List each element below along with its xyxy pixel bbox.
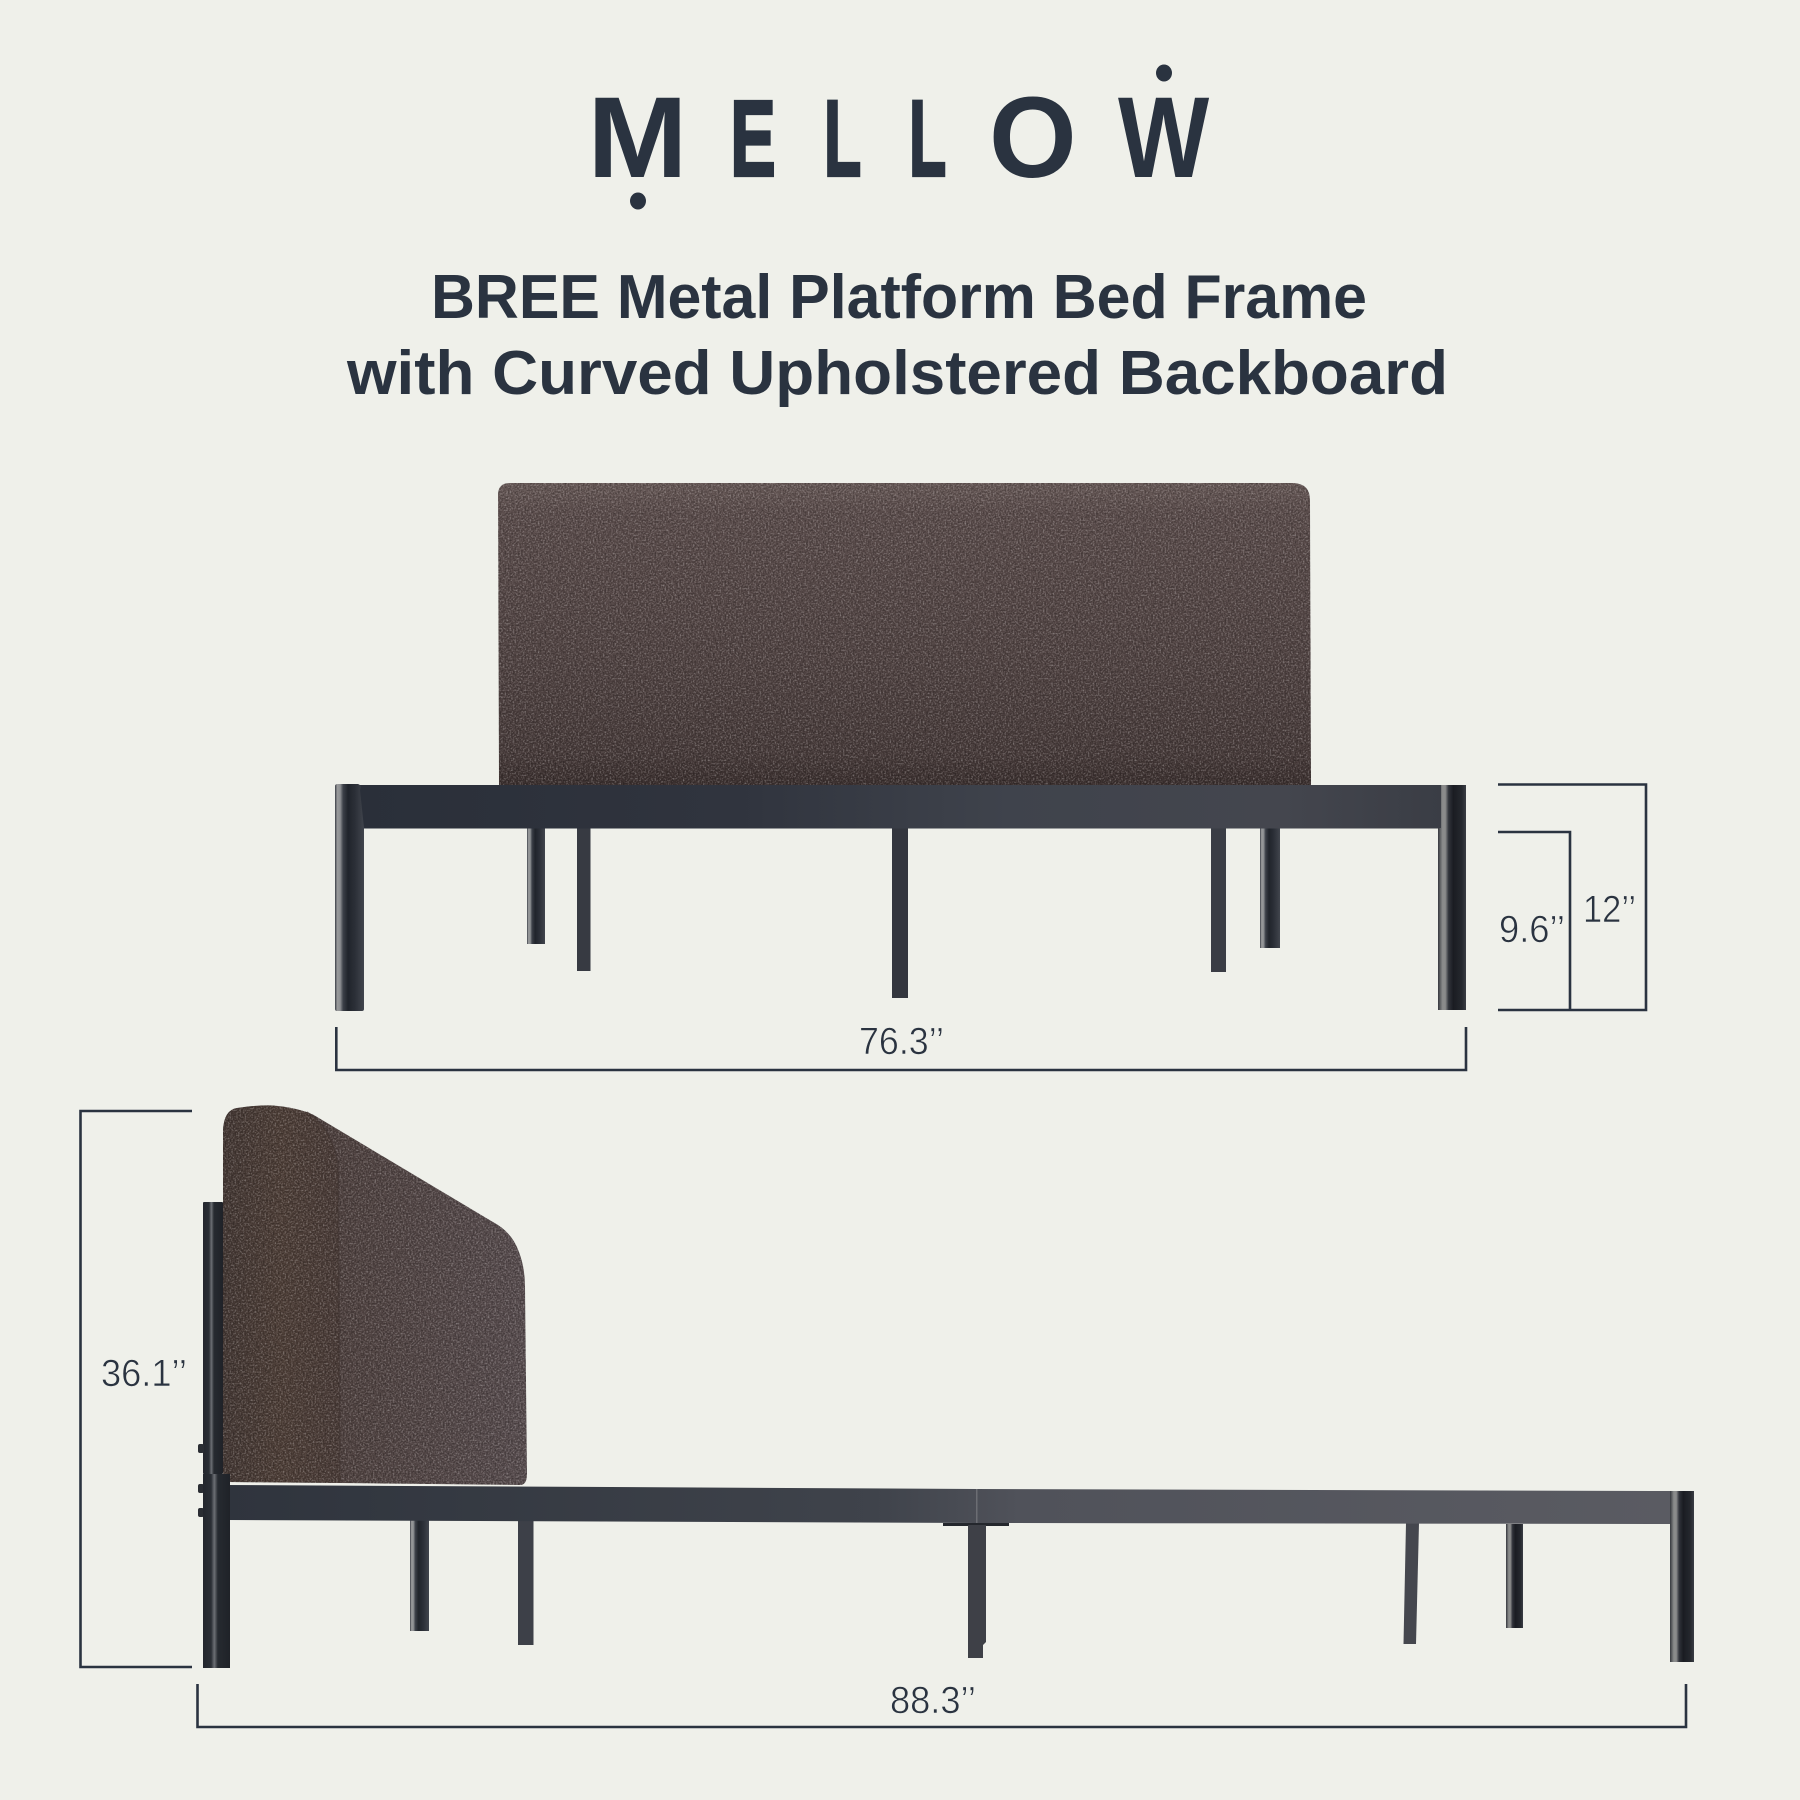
logo: MELLOW	[587, 64, 1210, 210]
bolts	[198, 1444, 204, 1517]
logo: MELLOW: E	[730, 78, 776, 199]
dimension: height 36.1: 36.1’’	[101, 1353, 187, 1395]
dimension: length 88.3: 88.3’’	[890, 1680, 976, 1722]
upper post	[203, 1202, 223, 1474]
logo: MELLOW: W	[1118, 73, 1210, 202]
side rail	[226, 1485, 1670, 1524]
panel: side view of bed	[198, 1105, 1694, 1668]
left corner leg	[335, 784, 364, 1011]
logo: MELLOW: L	[909, 78, 946, 199]
inner legs front	[527, 828, 1280, 998]
logo: MELLOW: M	[587, 72, 688, 201]
dimension: length 88.3	[198, 1680, 1686, 1727]
dimension: height 12	[1498, 784, 1646, 1010]
dimension: height 12: 12’’	[1583, 889, 1636, 931]
title: BREE Metal Platform Bed Frame	[431, 263, 1367, 332]
right corner leg	[1438, 785, 1466, 1010]
foot leg	[1670, 1491, 1694, 1662]
panel: front view of bed	[335, 483, 1466, 1011]
rail joint	[976, 1489, 978, 1523]
title: with Curved Upholstered Backboard	[346, 339, 1448, 408]
logo: MELLOW: O	[989, 74, 1077, 202]
lower post	[203, 1474, 230, 1668]
dimension: clearance 9.6	[1498, 832, 1570, 1010]
side legs	[410, 1519, 1523, 1658]
dimension: width 76.3	[336, 1021, 1466, 1070]
frame rail front	[358, 785, 1442, 828]
dimension: height 36.1	[80, 1111, 192, 1667]
headboard side	[223, 1105, 527, 1485]
headboard front	[498, 483, 1311, 785]
logo: MELLOW: L	[824, 78, 861, 199]
title	[346, 263, 1448, 408]
dimension: width 76.3: 76.3’’	[859, 1021, 944, 1063]
dimension: clearance 9.6: 9.6’’	[1499, 909, 1565, 951]
